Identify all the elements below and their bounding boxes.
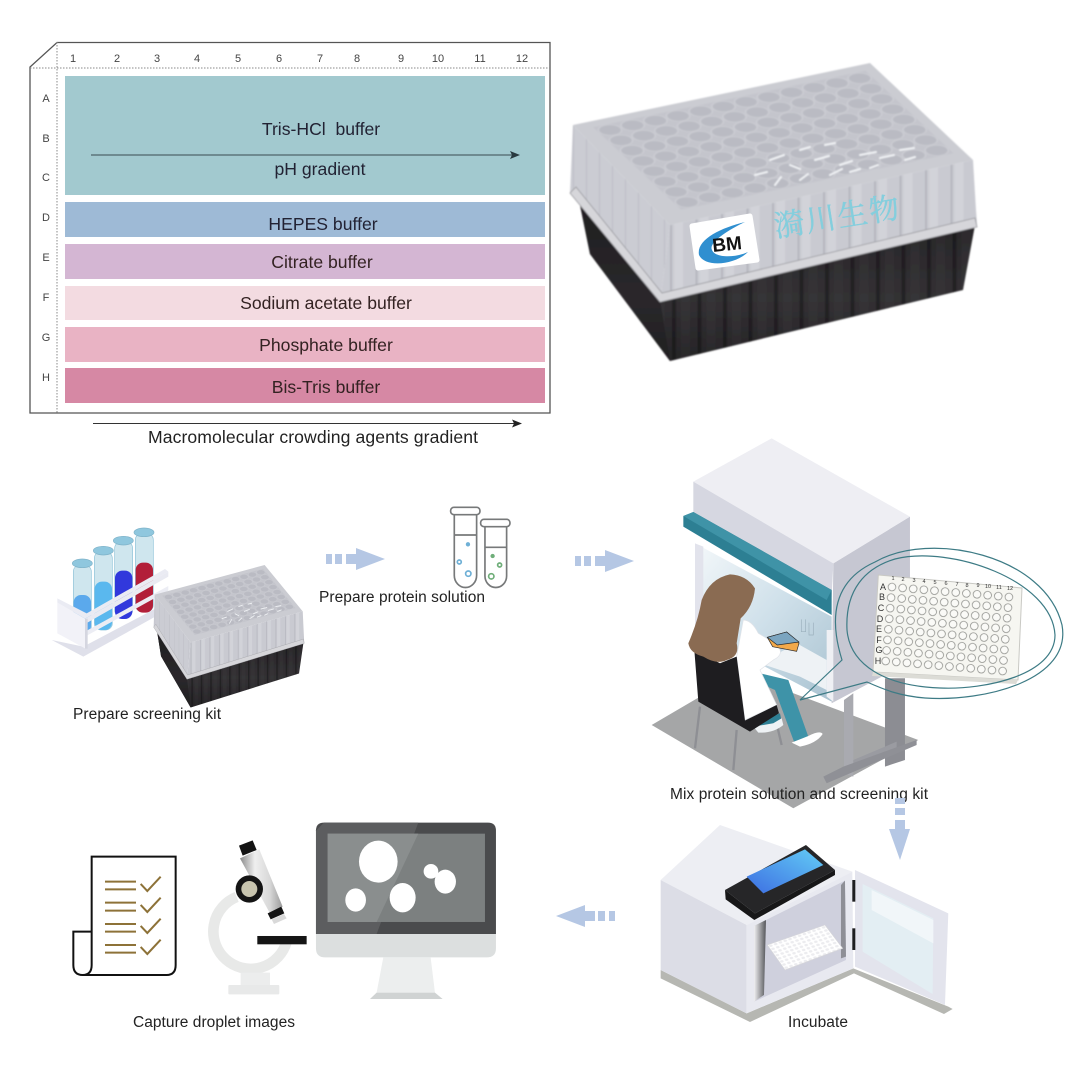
Tris-HCl buffer band: Tris-HCl buffer — [262, 119, 380, 139]
knob — [236, 875, 263, 903]
shoes — [792, 732, 823, 747]
Tris-HCl buffer band: pH gradient — [275, 159, 366, 179]
label: prepare protein solution: Prepare protein solution — [319, 589, 485, 606]
Citrate buffer band — [65, 244, 545, 279]
work table — [760, 643, 827, 690]
label: incubate: Incubate — [788, 1014, 848, 1031]
96-well plate: A — [880, 582, 886, 592]
base — [241, 973, 270, 986]
label: prepare screening kit: Prepare screening kit — [73, 706, 222, 723]
row letters: A — [42, 93, 50, 105]
96-well plate: B — [879, 592, 885, 602]
96-well plate: 2 — [901, 577, 905, 583]
Sodium acetate buffer band — [65, 286, 545, 320]
column numbers: 7 — [317, 53, 323, 65]
crowding gradient arrow — [93, 420, 522, 428]
plate map panel — [30, 42, 550, 413]
label: capture droplet images: Capture droplet images — [133, 1014, 295, 1031]
96-well plate: 8 — [965, 583, 969, 589]
Citrate buffer band: Citrate buffer — [271, 252, 373, 272]
row letters: E — [42, 252, 50, 264]
cabinet right panel — [832, 517, 910, 703]
droplets — [345, 841, 456, 912]
cabinet front — [693, 482, 833, 597]
cabinet top — [693, 438, 910, 563]
row letters: H — [42, 372, 50, 384]
96-well plate: C — [878, 603, 885, 613]
small tubes — [801, 619, 813, 635]
column numbers: 8 — [354, 53, 360, 65]
orange kit on table — [767, 632, 799, 651]
96-well plate: D — [877, 614, 884, 624]
illustration: biosafety cabinet with researcher — [652, 438, 918, 808]
Bis-Tris buffer band — [65, 368, 545, 403]
stage — [257, 936, 307, 944]
icon: microscope — [213, 840, 307, 994]
lab coat — [737, 620, 780, 720]
column numbers: 4 — [194, 53, 200, 65]
icon: monitor with droplets — [316, 823, 496, 999]
column numbers — [70, 53, 528, 65]
plate map outline — [30, 42, 550, 413]
row letters: D — [42, 212, 50, 224]
96-well plate: 10 — [985, 584, 991, 590]
column numbers: 1 — [70, 53, 76, 65]
cabinet legs — [823, 678, 917, 783]
cabinet glass chamber — [695, 543, 832, 702]
trousers — [760, 673, 808, 742]
column numbers: 12 — [516, 53, 528, 65]
stand — [377, 957, 435, 993]
96-well plate: 3 — [912, 578, 916, 584]
illustration: incubator — [661, 825, 953, 1022]
chair legs — [695, 707, 782, 770]
row letters: B — [42, 133, 50, 145]
96-well plate: G — [875, 645, 883, 655]
control panel — [725, 845, 835, 920]
incubator body — [661, 825, 853, 1013]
row letters — [42, 93, 50, 384]
96-well plate: F — [876, 635, 882, 645]
kit brand text: 漪川生物 — [771, 182, 904, 246]
photo: screening kit box — [570, 63, 977, 361]
column numbers: 9 — [398, 53, 404, 65]
teal sash band — [683, 512, 832, 615]
chair back — [694, 650, 779, 732]
arrow 1 — [326, 548, 385, 570]
tube — [240, 849, 283, 913]
row letters: C — [42, 172, 50, 184]
96-well plate: 12 — [1007, 586, 1013, 592]
column numbers: 5 — [235, 53, 241, 65]
test tube rack — [52, 528, 173, 657]
96-well plate: E — [876, 624, 882, 634]
kit logo label: BM — [711, 233, 743, 257]
Tris-HCl buffer band — [65, 76, 545, 195]
HEPES buffer band: HEPES buffer — [268, 214, 378, 234]
hair — [688, 574, 755, 662]
illustration: test tube rack and kit — [52, 528, 304, 707]
label: mix protein solution and screening kit: Mix protein solution and screening kit — [670, 786, 929, 803]
96-well plate: 6 — [944, 581, 948, 587]
96-well plate — [872, 575, 1022, 684]
96-well plate: 11 — [996, 585, 1002, 591]
small screening kit — [154, 565, 304, 707]
96-well plate: 5 — [933, 580, 937, 586]
arm — [213, 897, 287, 969]
Bis-Tris buffer band: Bis-Tris buffer — [272, 377, 380, 397]
column numbers: 2 — [114, 53, 120, 65]
incubator door — [852, 870, 948, 1005]
arrow 3 — [889, 798, 910, 860]
column numbers: 10 — [432, 53, 444, 65]
96-well plate: 4 — [922, 579, 926, 585]
96-well plate: 9 — [976, 583, 980, 589]
crowding gradient label: Macromolecular crowding agents gradient — [148, 427, 478, 447]
96-well plate: 1 — [891, 576, 895, 582]
Phosphate buffer band — [65, 327, 545, 362]
column numbers: 11 — [474, 53, 486, 65]
arrow 4 — [556, 905, 615, 927]
Sodium acetate buffer band: Sodium acetate buffer — [240, 293, 412, 313]
column numbers: 3 — [154, 53, 160, 65]
row letters: G — [42, 332, 50, 344]
96-well plate: H — [875, 656, 881, 666]
icon: checklist document — [73, 857, 176, 975]
incubated plate — [767, 925, 843, 970]
floor — [652, 673, 918, 808]
bubble outlines — [800, 548, 1063, 700]
incubator base shadow — [661, 968, 953, 1022]
arrow 2 — [575, 550, 634, 572]
Phosphate buffer band: Phosphate buffer — [259, 335, 393, 355]
96-well plate: 7 — [955, 582, 959, 588]
icon: protein solution tubes — [451, 507, 510, 588]
column numbers: 6 — [276, 53, 282, 65]
HEPES buffer band — [65, 202, 545, 237]
kit logo label — [692, 216, 757, 268]
zoom callout: speech bubble with 96-well plate — [800, 548, 1063, 700]
researcher — [688, 574, 823, 770]
row letters: F — [43, 292, 50, 304]
